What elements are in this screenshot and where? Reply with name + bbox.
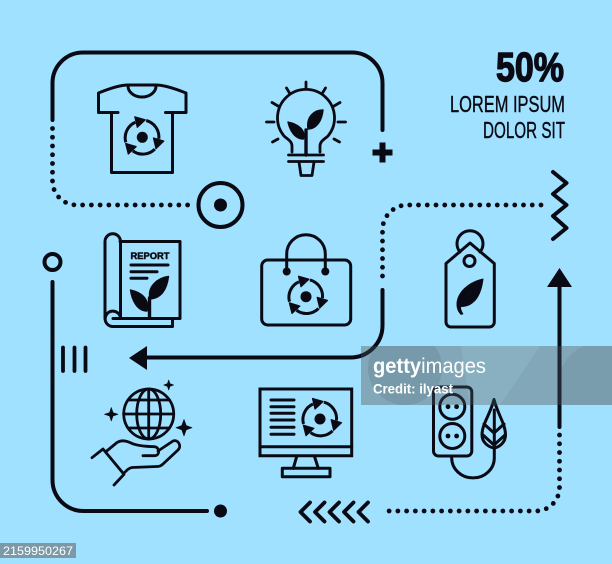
- icon: t-shirt: [98, 85, 186, 172]
- text block: LOREM IPSUM: [450, 91, 565, 117]
- icon: report booklet: REPORT: [130, 251, 170, 262]
- plus sign: [372, 142, 392, 162]
- text block: DOLOR SIT: [483, 117, 565, 143]
- bottom-left connector line: [52, 282, 207, 511]
- end dot: [214, 504, 227, 518]
- text block: [450, 91, 565, 143]
- icon: price tag with leaf: [446, 231, 494, 327]
- watermark banner backdrop: [361, 346, 612, 405]
- dotted connector from zigzag: [382, 205, 541, 283]
- icon: shopping bag: [262, 235, 351, 325]
- arrow pointing left: [129, 290, 383, 370]
- image id label: [0, 543, 76, 558]
- icon: report booklet: [105, 234, 180, 327]
- icon: light bulb with plant: [266, 82, 346, 176]
- chevrons: [300, 502, 368, 522]
- small ring: [44, 254, 60, 270]
- watermark overlay and text: gettyimages: [373, 355, 486, 378]
- dotted connector to target: [52, 128, 192, 205]
- image id label: 2159950267: [3, 546, 73, 558]
- target marker: [198, 183, 242, 227]
- icon: hand holding globe: [92, 380, 192, 485]
- icon: power strip with leaf: [434, 387, 506, 478]
- icon: computer monitor: [260, 389, 352, 477]
- watermark overlay and text: Credit: ilyast: [373, 382, 453, 396]
- headline 50%: 50%: [496, 44, 564, 90]
- zigzag: [553, 172, 566, 239]
- watermark overlay and text: [361, 346, 612, 405]
- top connector line: [52, 52, 382, 130]
- dotted connector bottom right: [381, 435, 560, 511]
- three bars: [63, 348, 86, 371]
- arrow pointing up: [547, 268, 572, 427]
